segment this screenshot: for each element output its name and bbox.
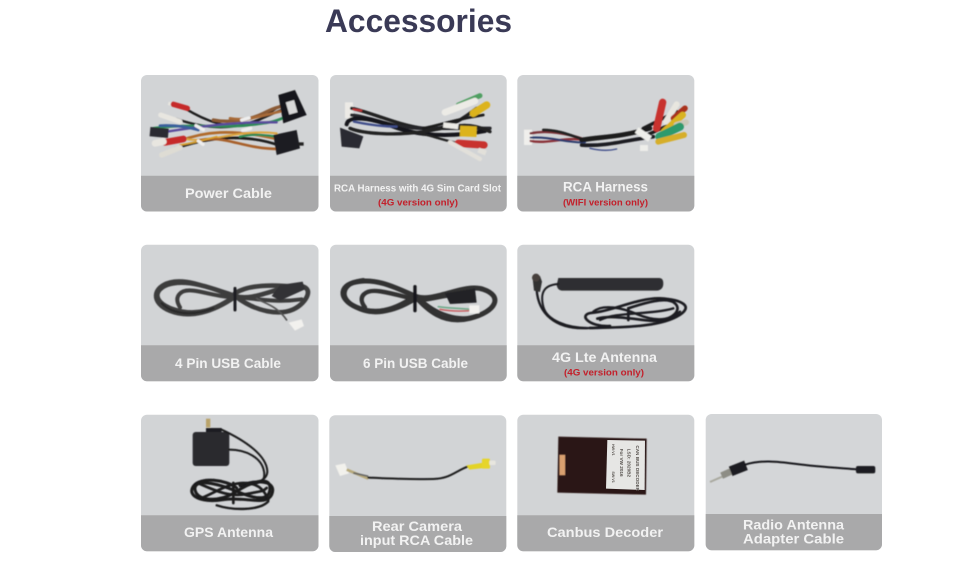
- label: RCA Harness with 4G Sim Card Slot: RCA Harness with 4G Sim Card Slot: [334, 184, 502, 194]
- panel: RCA harness with 4G SIM card slot: [330, 75, 507, 212]
- panel: 6 pin USB cable: [330, 245, 507, 381]
- label band: [706, 514, 882, 550]
- panel: GPS antenna: [141, 415, 318, 551]
- label: RCA Harness: RCA Harness: [563, 178, 648, 194]
- image: canbus decoder module: [557, 437, 647, 495]
- image: 6 pin USB cable: [343, 280, 495, 320]
- label band: [141, 515, 318, 551]
- label band: [141, 176, 318, 212]
- label band: [517, 176, 694, 212]
- label: 4G Lte Antenna: 4G Lte Antenna: [552, 349, 657, 365]
- panel: canbus decoder: [517, 415, 694, 551]
- label band: [141, 345, 318, 381]
- image: 4G LTE antenna: [532, 274, 686, 328]
- label: Rear Camera input RCA Cable: Rear Camera: [372, 518, 462, 534]
- label: 6 Pin USB Cable: 6 Pin USB Cable: [363, 355, 468, 371]
- image: canbus decoder module: SW:V1: [611, 471, 615, 483]
- label band: [329, 516, 506, 552]
- note: WIFI version only: (WIFI version only): [563, 198, 648, 208]
- image: canbus decoder module: For VW 2016: [619, 449, 624, 477]
- label band: [330, 176, 507, 212]
- note: 4G version only: (4G version only): [378, 198, 458, 208]
- label: Radio Antenna Adapter Cable: Adapter Cable: [743, 530, 844, 546]
- image: RCA harness WIFI: [524, 102, 686, 151]
- note: 4G version only: (4G version only): [564, 368, 644, 378]
- label: Rear Camera input RCA Cable: [360, 518, 473, 548]
- panel: RCA harness WIFI: [517, 75, 694, 212]
- panel: rear camera input RCA cable: [329, 415, 506, 552]
- label: Power Cable: Power Cable: [185, 185, 272, 201]
- label band: [517, 515, 694, 551]
- label band: [330, 345, 507, 381]
- image: canbus decoder module: CAN BUS DECODER: [635, 445, 640, 492]
- image: radio antenna adapter cable: [710, 461, 875, 482]
- image: RCA harness with SIM slot: [340, 96, 490, 159]
- label: Radio Antenna Adapter Cable: [743, 516, 844, 546]
- label: Rear Camera input RCA Cable: input RCA Cable: [360, 532, 473, 548]
- panel: 4G LTE antenna: [517, 245, 694, 381]
- label: 4 Pin USB Cable: 4 Pin USB Cable: [175, 355, 281, 371]
- panel: radio antenna adapter cable: [706, 414, 882, 550]
- label: Canbus Decoder: Canbus Decoder: [547, 524, 664, 540]
- image: rear camera RCA cable: [335, 459, 496, 479]
- panel: 4 pin USB cable: [141, 245, 318, 381]
- image: power cable harness: [150, 90, 307, 155]
- title: Accessories: [325, 3, 512, 39]
- image: canbus decoder module: HW:V1: [611, 444, 615, 456]
- image: GPS antenna: [192, 419, 273, 509]
- panel: power cable: [141, 75, 318, 212]
- label: Radio Antenna Adapter Cable: Radio Antenna: [743, 516, 844, 532]
- label: GPS Antenna: GPS Antenna: [184, 524, 273, 540]
- label band: [517, 345, 694, 381]
- image: 4 pin USB cable: [156, 281, 308, 331]
- image: canbus decoder module: LSD: 2020B2: [626, 449, 631, 478]
